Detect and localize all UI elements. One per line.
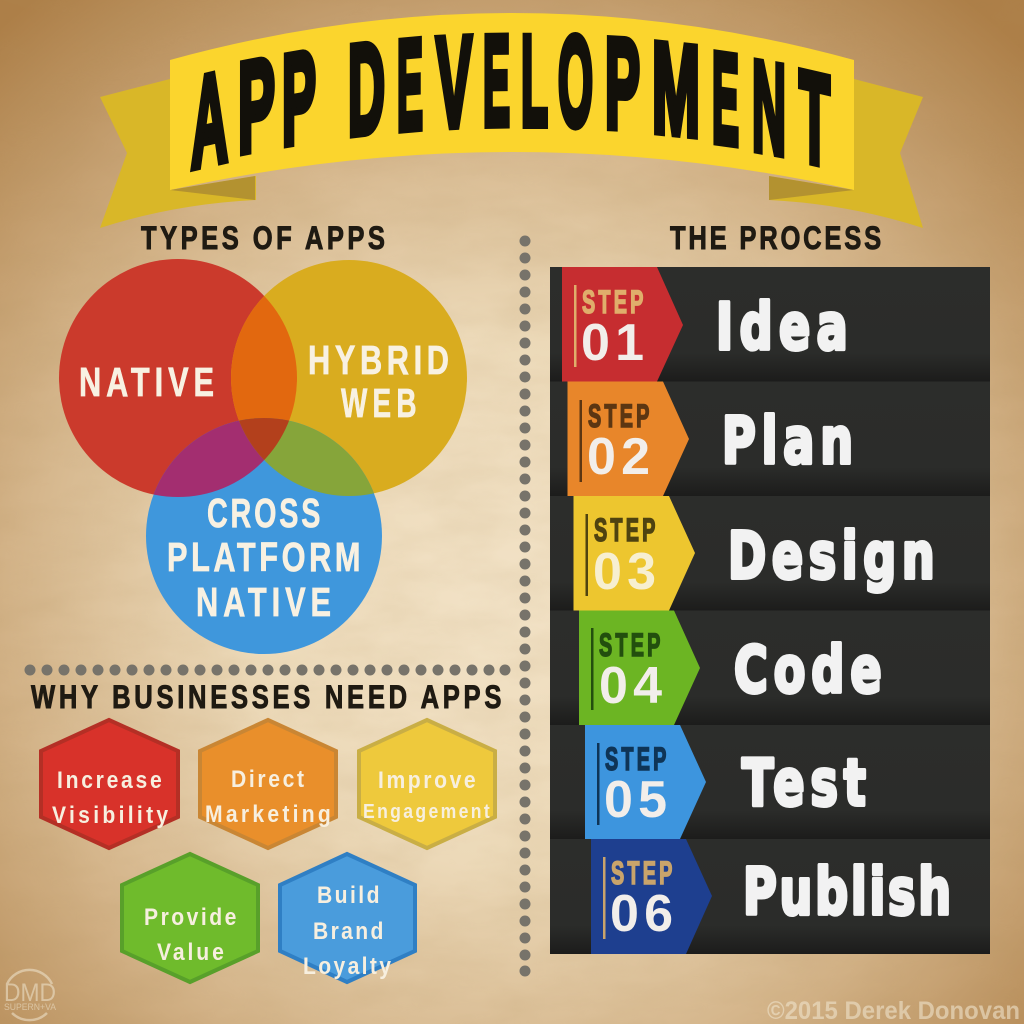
step 02: plan: STEP (588, 398, 649, 434)
banner right tail (769, 79, 923, 228)
label: cross platform native: PLATFORM (167, 534, 360, 580)
title text: APP DEVELOPMENT: P (605, 12, 640, 157)
step 05: test: Test (742, 746, 866, 821)
overlap: all three (239, 418, 289, 460)
heading: the process: THE PROCESS (670, 221, 881, 257)
hexagon: improve engagement: Engagement (363, 800, 490, 822)
step 02: plan (568, 382, 853, 496)
step 04: code: Code (734, 633, 882, 708)
hexagons: why businesses need apps (41, 720, 495, 982)
hexagon: direct marketing: Marketing (205, 801, 331, 827)
hexagon: build brand loyalty: Brand (313, 918, 383, 944)
title text: APP DEVELOPMENT (191, 10, 830, 196)
overlap: native and hybrid (231, 296, 297, 420)
step 06: publish: Publish (743, 855, 951, 930)
step 01: idea (562, 267, 848, 382)
circle: hybrid web (231, 260, 467, 496)
title text: APP DEVELOPMENT: D (348, 16, 385, 163)
step 06: publish: 06 (610, 885, 673, 943)
step 05: test (585, 725, 866, 839)
title text: APP DEVELOPMENT: E (712, 27, 739, 173)
label: hybrid web (308, 337, 449, 426)
logo: DMD Supernova (4, 970, 56, 1020)
step 03: design: 03 (593, 543, 656, 601)
venn diagram: types of apps (59, 259, 467, 654)
title banner (100, 10, 923, 228)
heading: types of apps: TYPES OF APPS (141, 221, 385, 257)
logo: DMD Supernova: DMD (4, 979, 56, 1007)
circle: cross platform native (146, 418, 382, 654)
label: cross platform native: CROSS (207, 491, 320, 536)
title text: APP DEVELOPMENT: P (238, 31, 275, 181)
title text: APP DEVELOPMENT: V (436, 10, 472, 155)
label: hybrid web: HYBRID (308, 337, 449, 383)
step 06: publish (591, 839, 951, 954)
step 02: plan: 02 (587, 428, 650, 486)
label: hybrid web: WEB (341, 381, 416, 426)
hexagon: provide value (122, 854, 258, 982)
hexagon: build brand loyalty (280, 854, 415, 982)
hexagon: improve engagement (359, 720, 495, 848)
title banner: T (799, 45, 830, 194)
panel background rows (550, 267, 990, 954)
hexagon: improve engagement: Improve (378, 767, 476, 793)
step 05: test: STEP (605, 741, 666, 777)
step 04: code: STEP (599, 627, 660, 663)
process panel (550, 267, 990, 954)
overlap: native and cross platform (154, 418, 288, 497)
step 03: design: STEP (594, 512, 655, 548)
hexagon: direct marketing: Direct (231, 766, 304, 792)
title text: APP DEVELOPMENT: L (521, 10, 548, 153)
heading: why businesses need apps: WHY BUSINESSES NEED APPS (31, 680, 501, 716)
title text: APP DEVELOPMENT: O (558, 10, 593, 154)
hexagon: build brand loyalty: Build (317, 882, 379, 908)
label: cross platform native: NATIVE (196, 579, 331, 625)
overlap: hybrid and cross platform (239, 418, 374, 496)
title text: APP DEVELOPMENT: E (483, 10, 510, 153)
hexagon: increase visibility: Increase (57, 767, 162, 793)
step 01: idea: Idea (716, 290, 848, 365)
step 06: publish: STEP (611, 855, 672, 891)
hexagon: provide value: Provide (144, 904, 236, 930)
title text: APP DEVELOPMENT: P (282, 24, 316, 173)
label: cross platform native (167, 491, 360, 625)
title text: APP DEVELOPMENT: N (752, 34, 786, 183)
banner right fold (769, 176, 854, 200)
banner main ribbon (170, 13, 854, 190)
step 05: test: 05 (604, 771, 667, 829)
circle: native (59, 259, 297, 497)
step 04: code (579, 610, 882, 725)
banner left tail (100, 79, 256, 228)
title text: APP DEVELOPMENT: M (652, 16, 700, 164)
title text: APP DEVELOPMENT: E (397, 13, 423, 158)
label: native: NATIVE (79, 359, 214, 405)
hexagon: direct marketing (200, 720, 336, 848)
step 03: design (574, 496, 935, 610)
step 03: design: Design (728, 519, 935, 594)
hexagon: build brand loyalty: Loyalty (303, 953, 391, 979)
step 04: code: 04 (599, 657, 662, 715)
hexagon: increase visibility (41, 720, 178, 848)
step 01: idea: STEP (582, 284, 643, 320)
logo: DMD Supernova: SUPERN+VA (4, 1002, 56, 1012)
step 01: idea: 01 (581, 314, 644, 372)
step 02: plan: Plan (722, 404, 853, 479)
hexagon: increase visibility: Visibility (52, 802, 169, 828)
hexagon: provide value: Value (157, 939, 224, 965)
title text: APP DEVELOPMENT: A (191, 45, 228, 196)
banner left fold (170, 176, 255, 200)
